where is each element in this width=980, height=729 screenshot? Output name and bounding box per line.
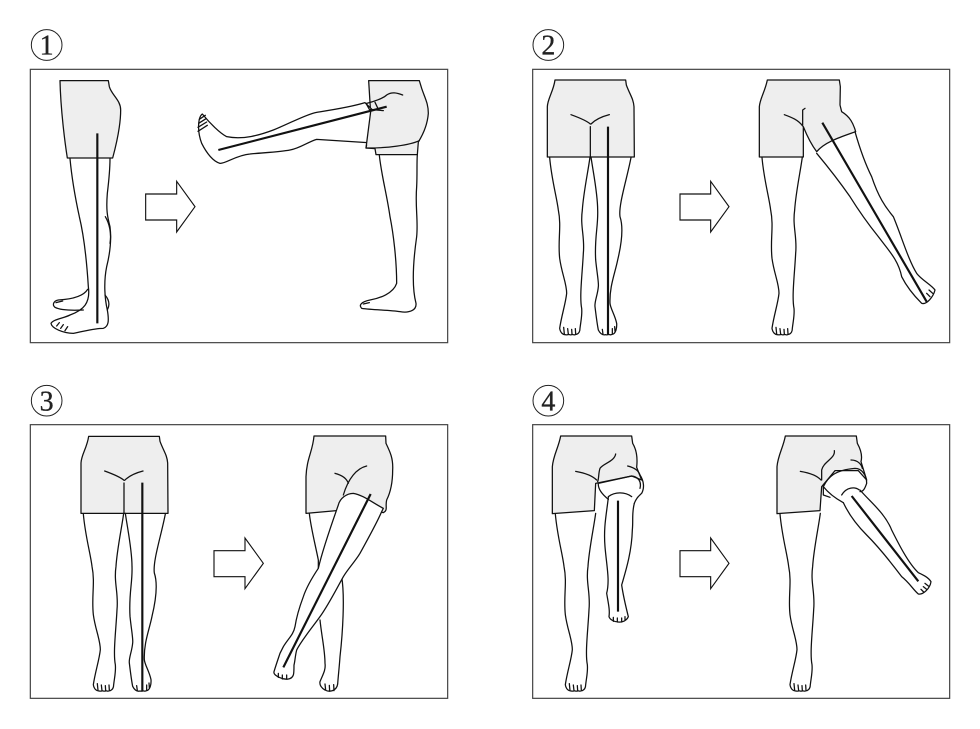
figure: standing front view (547, 80, 634, 335)
figure: leg crossed over (274, 436, 393, 691)
panel 4: bent knee rotation (533, 385, 950, 698)
panel 2: leg abduction (533, 30, 950, 343)
panel 1: leg flexion (30, 30, 448, 343)
number label 4: 4 (541, 386, 555, 417)
number label 3: 3 (40, 386, 54, 417)
panel frame 4 (533, 425, 950, 698)
figure: standing front view (81, 436, 168, 692)
figure: leg raised forward, side view (198, 81, 428, 312)
number label 1 (31, 30, 62, 62)
number label 2 (533, 30, 564, 62)
number label 3 (31, 385, 62, 417)
number label 1: 1 (40, 31, 54, 62)
arrow (214, 538, 263, 589)
panel 3: leg adduction (30, 385, 448, 698)
figure: standing leg side view (51, 81, 121, 333)
arrow (680, 181, 729, 232)
panel frame 3 (30, 425, 448, 698)
panel frame 1 (30, 69, 448, 343)
number label 4 (533, 385, 564, 417)
arrow (680, 538, 729, 589)
figure: knee raised, lower leg hanging (552, 436, 643, 691)
figure: leg raised sideways (759, 80, 935, 335)
panel frame 2 (533, 69, 950, 343)
number label 2: 2 (541, 31, 555, 62)
figure: knee raised, lower leg rotated outward (777, 436, 931, 691)
arrow (146, 181, 195, 232)
